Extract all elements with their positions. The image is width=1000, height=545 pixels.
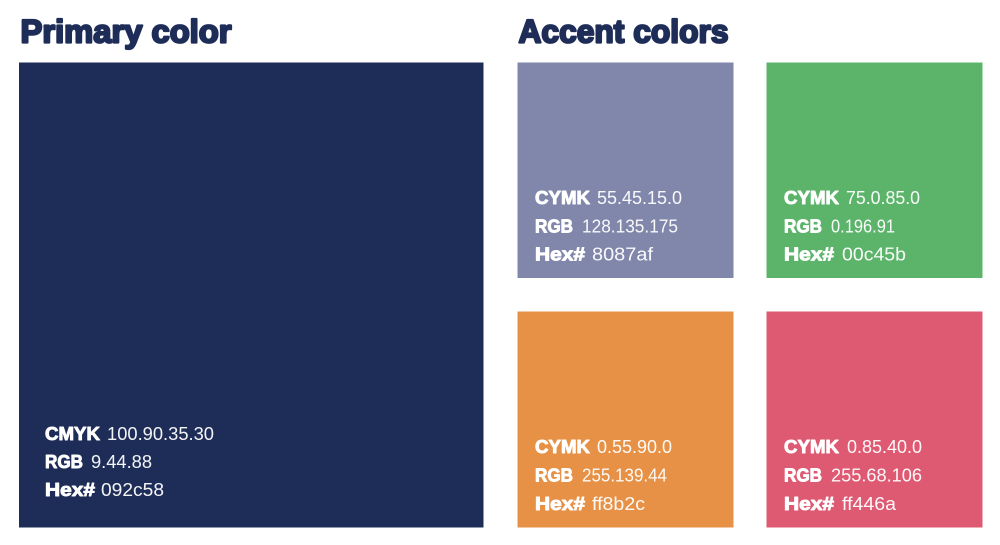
panel: primary navy swatch: 9.44.88 [91, 451, 152, 472]
panel: green accent swatch: 75.0.85.0 [846, 187, 920, 208]
panel: primary navy swatch: 092c58 [101, 479, 164, 500]
panel: primary navy swatch: CMYK [45, 424, 100, 444]
panel: orange accent swatch [518, 312, 734, 528]
panel: orange accent swatch: ff8b2c [592, 493, 645, 514]
panel: primary navy swatch [19, 62, 484, 528]
panel: green accent swatch: 0.196.91 [831, 216, 895, 236]
panel: pink accent swatch: 0.85.40.0 [847, 436, 922, 457]
heading: accent colors: Accent colors [518, 14, 728, 50]
panel: purple accent swatch: 128.135.175 [582, 216, 678, 236]
panel: purple accent swatch: 8087af [592, 244, 654, 264]
panel: orange accent swatch: Hex# [535, 494, 585, 514]
panel: orange accent swatch: CYMK [535, 437, 590, 457]
panel: primary navy swatch: 100.90.35.30 [107, 423, 214, 444]
panel: pink accent swatch: Hex# [784, 494, 834, 514]
panel: purple accent swatch: 55.45.15.0 [597, 187, 682, 208]
panel: orange accent swatch: 255.139.44 [582, 464, 667, 486]
panel: green accent swatch: CYMK [784, 188, 839, 208]
panel: green accent swatch: Hex# [784, 244, 834, 264]
panel: pink accent swatch: CYMK [784, 437, 839, 457]
panel: green accent swatch: RGB [784, 216, 822, 236]
panel: primary navy swatch: RGB [45, 452, 83, 472]
heading: primary color: Primary color [20, 14, 231, 50]
panel: pink accent swatch: ff446a [842, 493, 897, 514]
panel: pink accent swatch [766, 312, 982, 528]
panel: green accent swatch [766, 62, 982, 278]
panel: purple accent swatch: RGB [535, 216, 573, 236]
panel: green accent swatch: 00c45b [842, 244, 906, 264]
panel: orange accent swatch: 0.55.90.0 [597, 436, 672, 457]
panel: orange accent swatch: RGB [535, 466, 573, 486]
panel: purple accent swatch: CYMK [535, 188, 590, 208]
panel: pink accent swatch: 255.68.106 [831, 464, 922, 486]
panel: purple accent swatch [518, 62, 734, 278]
panel: pink accent swatch: RGB [784, 466, 822, 486]
panel: purple accent swatch: Hex# [535, 244, 585, 264]
panel: primary navy swatch: Hex# [45, 480, 95, 500]
